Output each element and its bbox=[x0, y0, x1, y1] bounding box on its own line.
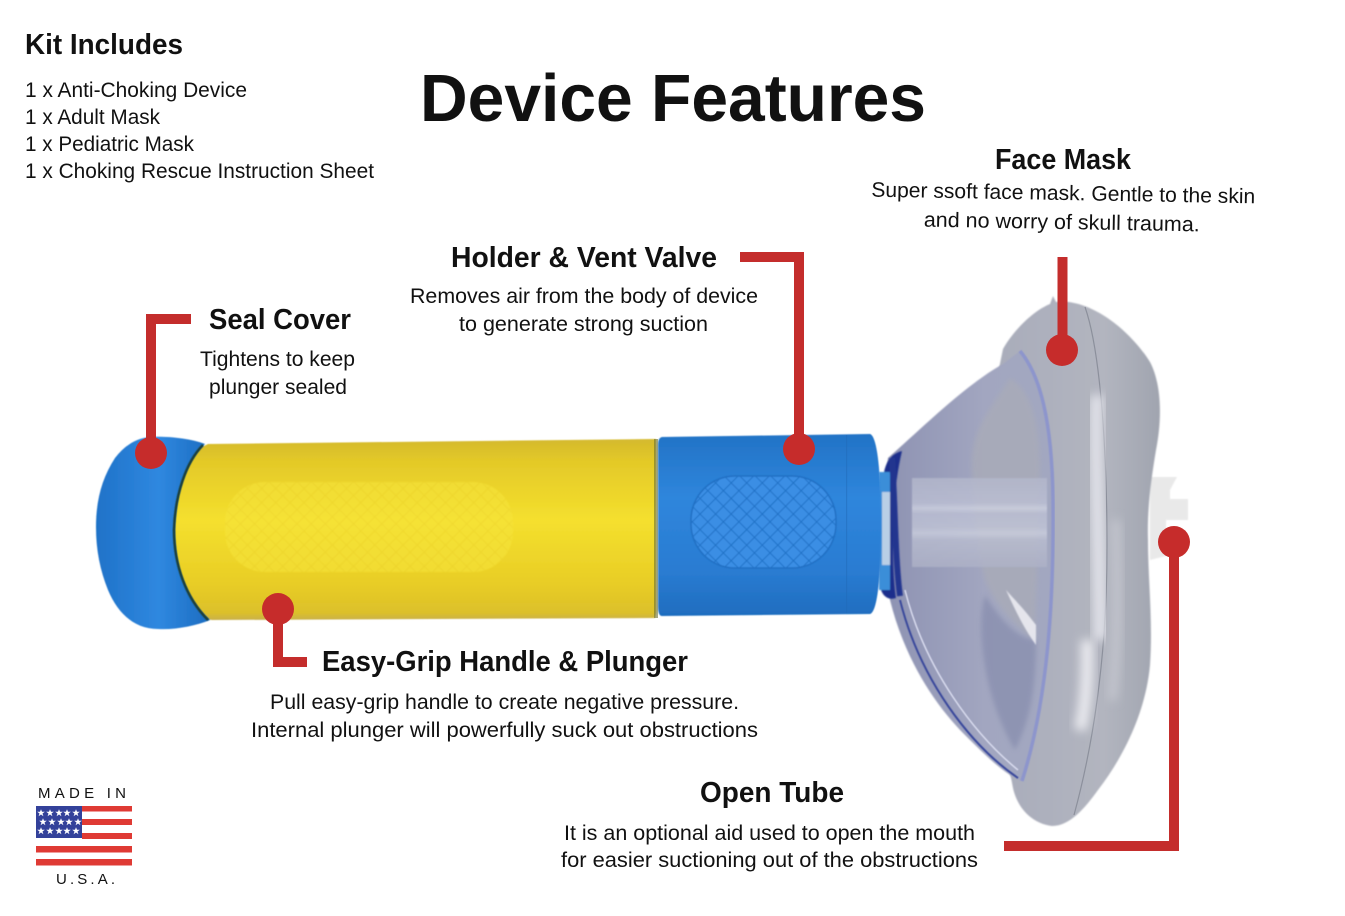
callout: face mask bbox=[871, 144, 1255, 366]
USA label: U.S.A. bbox=[56, 871, 115, 888]
holder text bbox=[410, 285, 758, 336]
handle heading: Easy-Grip Handle & Plunger bbox=[322, 646, 688, 678]
open tube end bbox=[1150, 477, 1188, 560]
kit items: 1 x Adult Mask bbox=[25, 106, 160, 129]
seal cover leader bbox=[135, 319, 191, 469]
open tube heading: Open Tube bbox=[700, 777, 844, 809]
made in label: MADE IN bbox=[38, 785, 126, 802]
kit items: 1 x Anti-Choking Device bbox=[25, 79, 247, 102]
handle text: Pull easy-grip handle to create negative pressure. bbox=[270, 691, 739, 714]
handle leader bbox=[262, 593, 307, 662]
blue seal cover cap bbox=[96, 437, 210, 629]
holder text: Removes air from the body of device bbox=[410, 285, 758, 308]
transparent mask dome bbox=[885, 351, 1053, 781]
kit heading: Kit Includes bbox=[25, 29, 183, 61]
mask neck bbox=[879, 451, 902, 599]
seal cover text bbox=[200, 348, 355, 399]
made in USA badge bbox=[36, 785, 132, 888]
open tube text: It is an optional aid used to open the mouth bbox=[564, 822, 975, 845]
cap seam bbox=[174, 445, 208, 620]
face mask text: and no worry of skull trauma. bbox=[924, 209, 1200, 236]
callout: holder and vent valve bbox=[410, 242, 815, 465]
face mask leader bbox=[1046, 257, 1078, 366]
face mask text bbox=[871, 179, 1255, 237]
open tube text: for easier suctioning out of the obstructions bbox=[561, 849, 978, 872]
open tube leader bbox=[1004, 526, 1190, 846]
face mask heading: Face Mask bbox=[995, 144, 1132, 176]
kit items: 1 x Choking Rescue Instruction Sheet bbox=[25, 160, 374, 183]
open tube text bbox=[561, 822, 978, 872]
holder grip texture bbox=[691, 476, 836, 568]
holder text: to generate strong suction bbox=[459, 313, 708, 336]
seal cover text: plunger sealed bbox=[209, 376, 347, 399]
holder heading: Holder & Vent Valve bbox=[451, 242, 717, 274]
title: Device Features bbox=[420, 61, 926, 136]
kit includes list bbox=[25, 29, 374, 183]
seal cover heading: Seal Cover bbox=[209, 304, 351, 336]
face mask text: Super ssoft face mask. Gentle to the skin bbox=[871, 179, 1255, 208]
device illustration bbox=[96, 296, 1188, 826]
kit items: 1 x Pediatric Mask bbox=[25, 133, 194, 156]
seal cover text: Tightens to keep bbox=[200, 348, 355, 371]
handle text: Internal plunger will powerfully suck out obstructions bbox=[251, 719, 758, 742]
callout: open tube bbox=[561, 526, 1190, 872]
face mask cushion bbox=[960, 296, 1160, 826]
handle grip texture bbox=[225, 482, 513, 572]
icon: US flag bbox=[36, 806, 132, 866]
holder leader bbox=[740, 257, 815, 465]
yellow easy-grip handle bbox=[174, 439, 658, 620]
handle text bbox=[251, 691, 758, 742]
callout: seal cover bbox=[135, 304, 355, 469]
kit items bbox=[25, 79, 374, 183]
blue holder and vent valve bbox=[658, 434, 881, 616]
callout: easy-grip handle and plunger bbox=[251, 593, 758, 742]
